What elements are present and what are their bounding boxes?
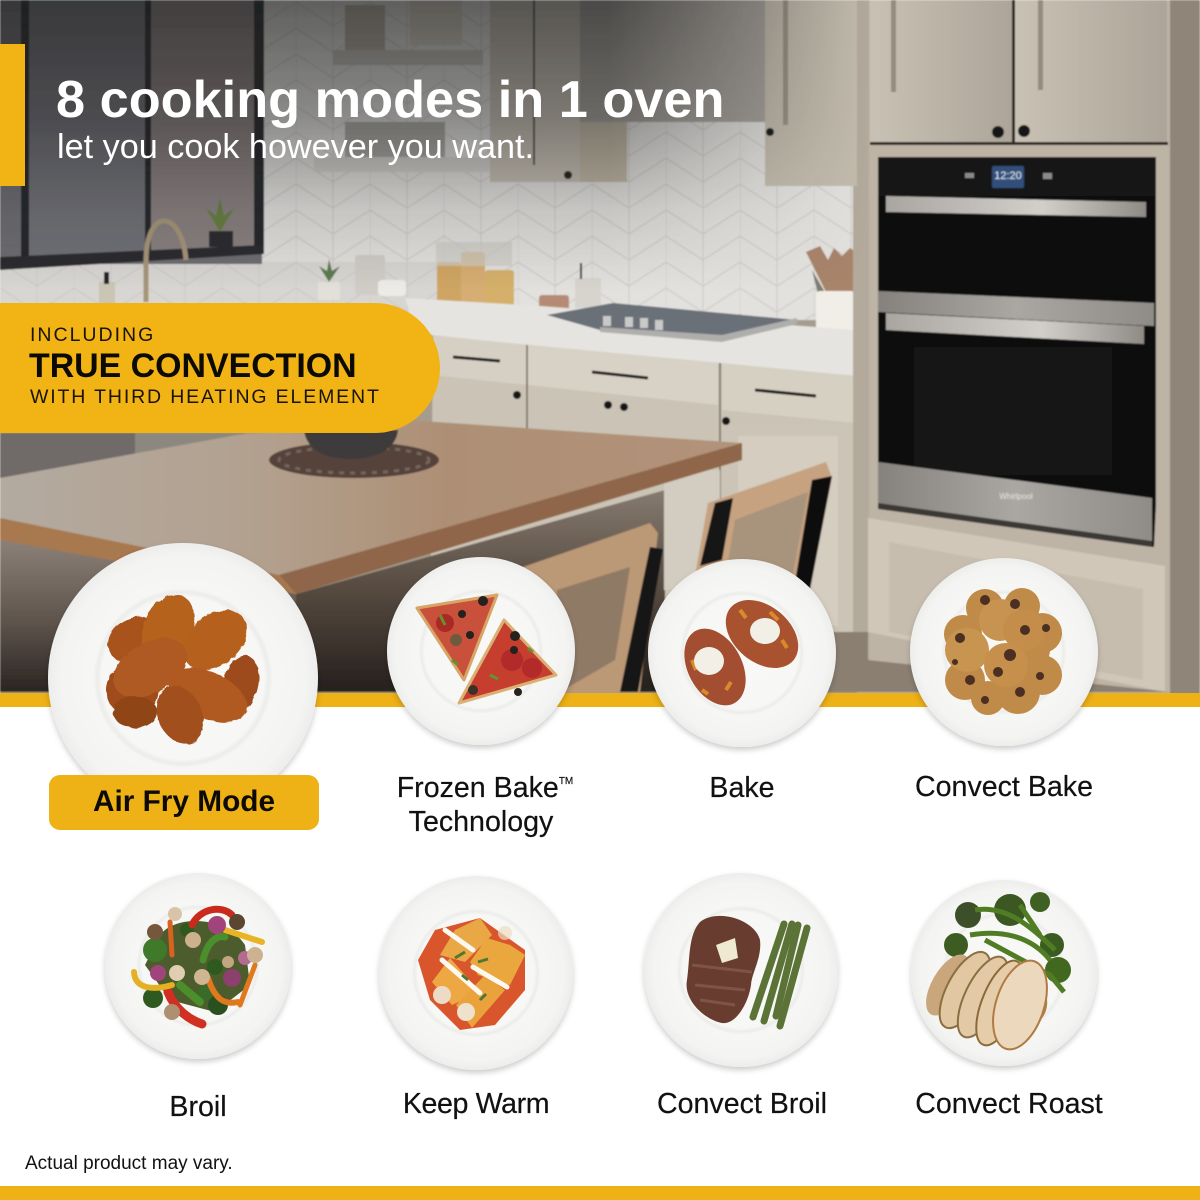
upper tall cabinet xyxy=(870,0,1014,144)
oven: 12:20 xyxy=(994,170,1022,182)
chair right xyxy=(696,462,832,640)
plate: pizza xyxy=(387,557,575,745)
label: frozen bake xyxy=(397,772,573,838)
label: convect bake: Convect Bake xyxy=(915,771,1093,803)
plate: baked potatoes xyxy=(648,559,836,747)
counter xyxy=(405,298,855,376)
plate: air fry xyxy=(48,543,318,813)
plate: cookies xyxy=(910,558,1098,746)
subtitle: let you cook however you want. xyxy=(57,128,534,166)
bottom yellow band xyxy=(0,1186,1200,1200)
callout: true convection: INCLUDING xyxy=(30,324,155,346)
jars and countertop items xyxy=(437,262,461,304)
shelves xyxy=(333,50,483,65)
top overlay xyxy=(0,0,870,290)
chair left xyxy=(520,523,663,692)
label: broil: Broil xyxy=(169,1091,227,1123)
yellow accent bar top left xyxy=(0,44,25,186)
lower tall cabinet xyxy=(868,518,1165,692)
label: frozen bake: Technology xyxy=(409,806,553,838)
callout: true convection: WITH THIRD HEATING ELEMENT xyxy=(30,386,381,408)
plate: steak and asparagus xyxy=(644,873,838,1067)
oven xyxy=(878,157,1156,547)
label: frozen bake: Frozen BakeTM xyxy=(397,772,573,804)
plate: roast turkey and broccolini xyxy=(911,880,1097,1066)
backsplash xyxy=(250,0,870,320)
under table xyxy=(0,535,296,692)
label: convect roast: Convect Roast xyxy=(915,1088,1103,1120)
plate: enchiladas xyxy=(379,876,573,1070)
oven: Whirlpool xyxy=(999,492,1033,501)
title: 8 cooking modes in 1 oven xyxy=(56,71,724,129)
cooktop xyxy=(547,303,797,340)
label: keep warm: Keep Warm xyxy=(403,1088,549,1120)
faucet xyxy=(146,221,186,302)
plate: broil vegetables xyxy=(105,873,291,1059)
lower cabinets xyxy=(430,336,856,640)
wall cabinet right of hood xyxy=(765,0,857,186)
utensils xyxy=(806,246,856,296)
footnote: Actual product may vary. xyxy=(25,1153,233,1174)
placemat and bowl xyxy=(269,442,439,478)
tall cabinet column xyxy=(857,0,1170,700)
floor xyxy=(625,632,1170,692)
air fry label pill xyxy=(49,775,319,830)
yellow divider band xyxy=(0,693,1200,707)
island table top xyxy=(0,420,742,575)
area behind island xyxy=(0,433,135,493)
callout: true convection: TRUE CONVECTION xyxy=(29,347,357,385)
air fry label pill: Air Fry Mode xyxy=(93,785,275,818)
upper cabinet xyxy=(490,0,580,182)
range hood xyxy=(580,0,765,122)
label: convect broil: Convect Broil xyxy=(657,1088,827,1120)
kitchen photo background xyxy=(0,0,1200,693)
callout: true convection xyxy=(0,303,440,433)
soap bottle xyxy=(99,282,115,304)
label: bake: Bake xyxy=(709,772,775,804)
window xyxy=(0,0,262,264)
